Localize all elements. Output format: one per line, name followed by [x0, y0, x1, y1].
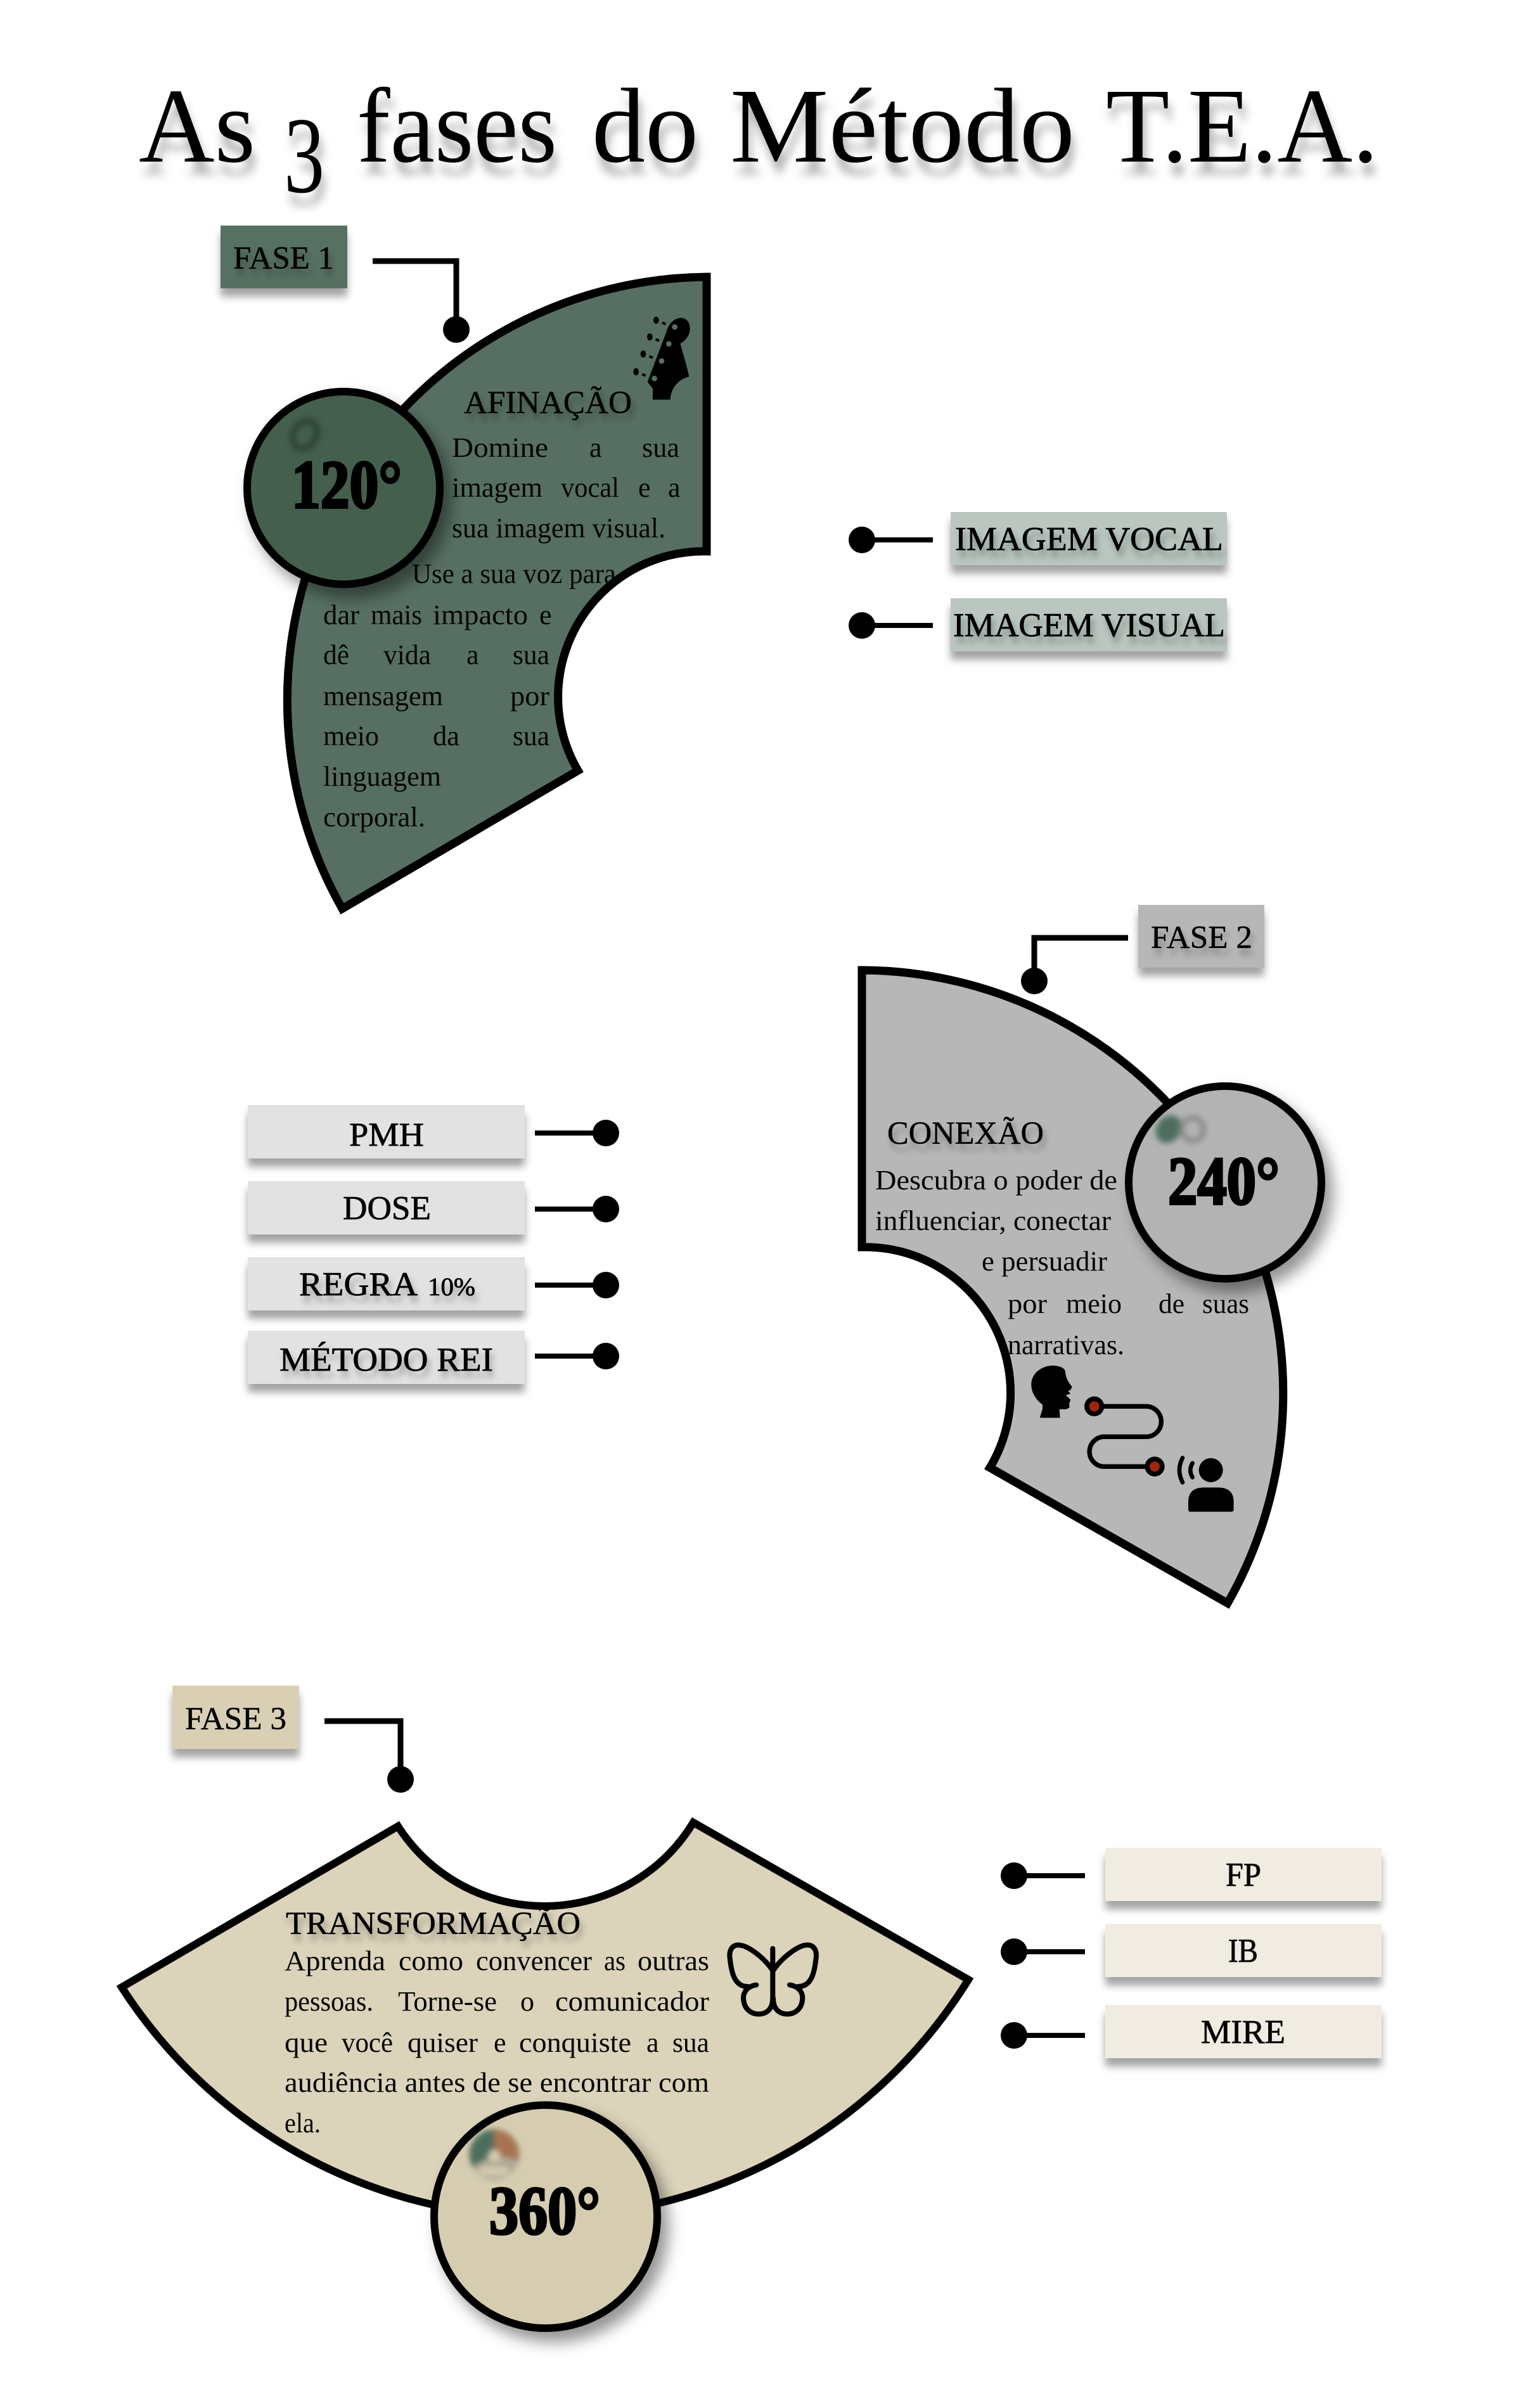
heading: transformação: TRANSFORMAÇÃO	[286, 1906, 581, 1942]
text block: afinação: Use a sua voz para	[412, 558, 616, 589]
badge 360 degrees	[434, 2105, 657, 2328]
text block: conexão: por	[1008, 1288, 1047, 1319]
text block: conexão: suas	[1202, 1288, 1249, 1319]
badge 240 degrees: 240°	[1168, 1144, 1280, 1219]
badge 120 degrees: 120°	[292, 447, 402, 523]
text block: transformação: a	[646, 2027, 659, 2058]
fase 2 label	[1138, 905, 1264, 968]
item: imagem visual	[849, 598, 1227, 651]
panel: fase 2	[862, 905, 1321, 1603]
text block: transformação: convencer	[476, 1945, 592, 1976]
text block: afinação: meio	[323, 720, 379, 752]
sector shape fase 2	[862, 970, 1283, 1603]
text block: conexão: meio	[1066, 1288, 1122, 1319]
text block: transformação	[285, 1945, 709, 2139]
text block: afinação: vida	[383, 639, 431, 670]
sector shape fase 1	[287, 277, 707, 909]
text block: transformação: conquiste	[519, 2027, 631, 2058]
text block: afinação: sua imagem visual.	[452, 513, 665, 544]
title: 3	[284, 96, 324, 216]
text block: afinação: vocal	[561, 472, 619, 503]
badge 120 degrees	[247, 392, 440, 584]
item: dose: DOSE	[343, 1190, 431, 1227]
panel: fase 3	[122, 1686, 968, 2328]
text block: afinação: mensagem	[323, 681, 443, 712]
icon: speaker to listener	[1031, 1366, 1234, 1512]
text block: transformação: que	[285, 2027, 328, 2058]
item: pmh	[248, 1105, 619, 1158]
text block: transformação: Aprenda	[285, 1945, 385, 1976]
text block: transformação: e	[494, 2027, 506, 2058]
text block: afinação: sua	[513, 639, 549, 670]
item: método rei: MÉTODO REI	[279, 1342, 493, 1378]
text block: afinação: Domine	[452, 432, 548, 463]
text block: afinação: dê	[323, 639, 349, 670]
text block: afinação: sua	[642, 432, 679, 463]
text block: afinação	[323, 432, 681, 833]
text block: transformação: audiência antes de se encontrar com	[285, 2067, 709, 2098]
text block: conexão: de	[1158, 1288, 1184, 1319]
text block: conexão: influenciar, conectar	[875, 1205, 1111, 1236]
badge 240 degrees	[1129, 1086, 1321, 1279]
text block: afinação: e	[539, 599, 552, 631]
text block: afinação: mais	[371, 599, 422, 631]
item: imagem vocal	[849, 512, 1227, 565]
item: regra 10%: REGRA	[299, 1266, 418, 1303]
title: fases	[357, 67, 557, 185]
text block: transformação: o	[520, 1986, 534, 2017]
item: regra 10%: 10%	[428, 1272, 475, 1301]
text block: transformação: você	[342, 2027, 393, 2058]
text block: transformação: como	[399, 1945, 463, 1976]
text block: conexão: e persuadir	[982, 1246, 1107, 1277]
text block: afinação: corporal.	[323, 802, 425, 833]
item: dose	[248, 1181, 619, 1234]
fase 3 label: FASE 3	[185, 1701, 286, 1737]
item: imagem vocal: IMAGEM VOCAL	[955, 521, 1223, 558]
text block: transformação: Torne-se	[398, 1986, 497, 2017]
item: fp: FP	[1226, 1857, 1261, 1893]
heading: afinação: AFINAÇÃO	[464, 385, 632, 421]
text block: afinação: impacto	[433, 599, 528, 631]
text block: afinação: por	[510, 681, 549, 712]
text block: afinação: linguagem	[323, 761, 441, 792]
item: regra 10%	[248, 1257, 619, 1310]
item: imagem visual: IMAGEM VISUAL	[953, 607, 1225, 644]
title: T.E.A.	[1106, 67, 1378, 185]
text block: afinação: a	[466, 639, 479, 670]
list: fase 2 items	[248, 1105, 619, 1384]
title: As	[139, 67, 255, 185]
connector fase 1	[373, 261, 470, 343]
fase 1 label	[221, 226, 347, 288]
list: fase 3 items	[1001, 1848, 1382, 2058]
item: fp	[1001, 1848, 1382, 1901]
text block: conexão: Descubra o poder de	[875, 1165, 1117, 1196]
item: pmh: PMH	[349, 1117, 424, 1153]
text block: conexão: narrativas.	[1008, 1329, 1124, 1361]
heading: conexão: CONEXÃO	[887, 1116, 1044, 1151]
text block: transformação: comunicador	[555, 1986, 709, 2017]
panel: fase 1	[221, 226, 707, 909]
text block: transformação: ela.	[285, 2108, 321, 2139]
item: ib: IB	[1228, 1933, 1258, 1969]
badge 360 degrees: 360°	[489, 2174, 600, 2249]
text block: transformação: pessoas.	[285, 1986, 373, 2017]
connector fase 3	[324, 1721, 414, 1793]
title: Método	[730, 67, 1075, 185]
fase 3 label	[172, 1686, 299, 1749]
item: ib	[1001, 1924, 1382, 1977]
icon: guitar headstock	[633, 317, 690, 400]
item: método rei	[248, 1331, 619, 1384]
text block: transformação: outras	[638, 1945, 709, 1976]
text block: afinação: imagem	[452, 472, 542, 503]
text block: transformação: as	[604, 1945, 626, 1976]
list: fase 1 items	[849, 512, 1227, 651]
fase 1 label: FASE 1	[233, 241, 334, 276]
text block: afinação: a	[668, 472, 681, 503]
fase 2 label: FASE 2	[1151, 920, 1252, 956]
text block: afinação: da	[433, 720, 459, 752]
title: do	[592, 67, 698, 185]
sector shape fase 3	[122, 1822, 968, 2217]
text block: conexão	[875, 1165, 1249, 1361]
text block: afinação: sua	[513, 720, 549, 752]
text block: afinação: dar	[323, 599, 359, 631]
text block: transformação: sua	[672, 2027, 709, 2058]
text block: afinação: e	[638, 472, 651, 503]
winding path	[1089, 1406, 1161, 1466]
text block: afinação: a	[589, 432, 602, 463]
text block: transformação: quiser	[408, 2027, 478, 2058]
item: mire	[1001, 2005, 1382, 2058]
icon: butterfly	[729, 1945, 816, 2014]
item: mire: MIRE	[1201, 2014, 1285, 2051]
speaking head	[1031, 1366, 1072, 1418]
title	[139, 67, 1378, 216]
listener	[1179, 1458, 1234, 1512]
connector fase 2	[1021, 938, 1128, 994]
